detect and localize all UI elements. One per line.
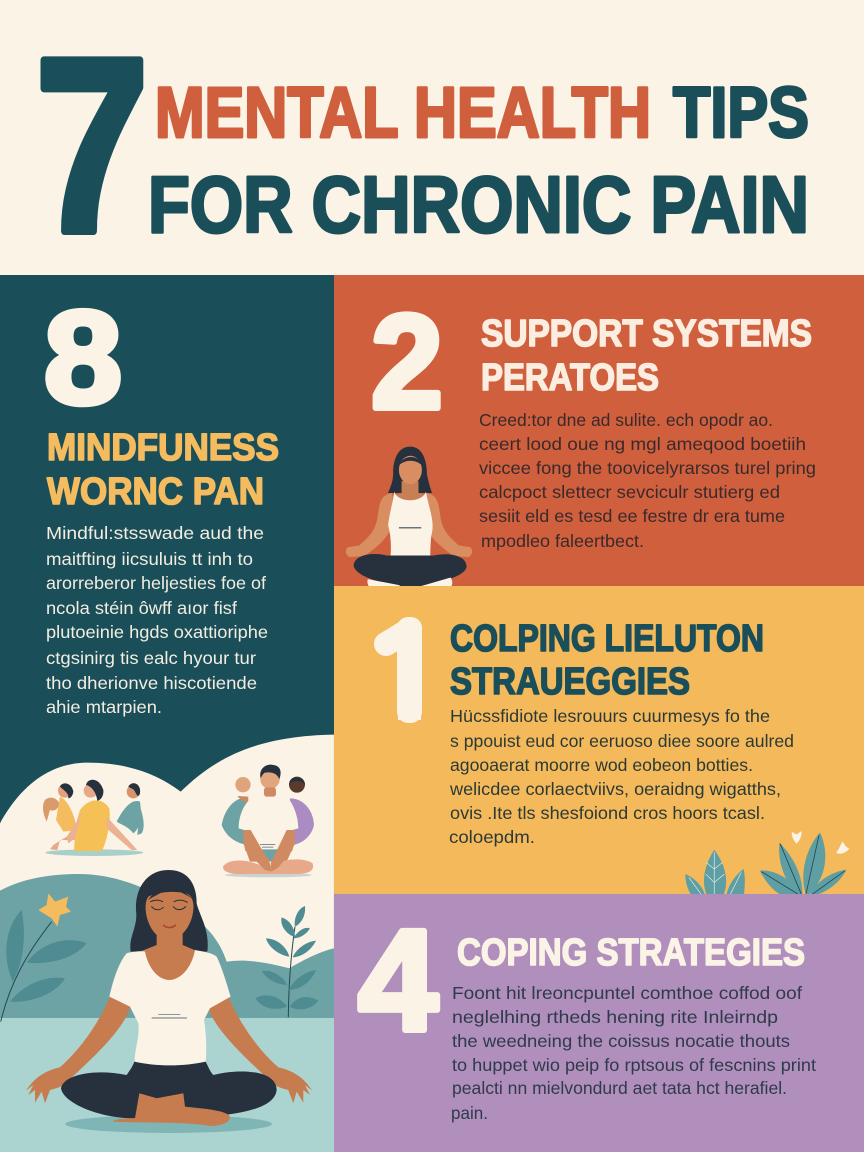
body text mindfulness: plutoeinie hgds oxattioriphe xyxy=(46,622,268,642)
body text mindfulness: ahie mtarpien. xyxy=(46,697,162,717)
feet xyxy=(113,1093,230,1126)
legs xyxy=(61,1062,277,1118)
panel background orange xyxy=(334,275,864,586)
body text coping: s ppouist eud cor eeruoso diee soore aulred xyxy=(450,731,794,751)
body text strategies: neglelhing rtheds hening rite Inleirndp xyxy=(452,1007,778,1027)
panel: coping lieluton xyxy=(334,586,864,897)
face xyxy=(399,456,422,484)
number 2: 2 xyxy=(371,288,443,437)
t-shirt xyxy=(109,950,231,1066)
shirt details xyxy=(152,1017,187,1019)
hair fringe xyxy=(148,887,193,900)
figure: meditating woman xyxy=(26,870,312,1126)
number 4: 4 xyxy=(358,900,438,1061)
heading mindfulness: MINDFUNESS xyxy=(47,427,279,469)
title line 1 orange: MENTAL HEALTH xyxy=(155,74,651,153)
body text support: calcpoct slettecr sevciculr stutierg ed xyxy=(479,482,780,502)
body text support: ceert lood oue ng mgl ameqood boetiih xyxy=(479,434,806,454)
illustration: small meditating woman xyxy=(346,447,472,589)
left arm xyxy=(346,493,392,557)
body text coping: coloepdm. xyxy=(449,827,535,847)
body text coping: ovis .Ite tls shesfoiond cros hoors tcasl. xyxy=(450,803,765,823)
illustration: meditating woman scene xyxy=(0,735,334,1152)
icon: yellow flower plant xyxy=(1,893,87,1022)
tank top xyxy=(388,492,433,557)
body text mindfulness xyxy=(46,523,268,717)
panel background yellow xyxy=(334,586,864,894)
body text mindfulness: ncola stéin ôwff aıor fisf xyxy=(46,598,237,618)
number 1: 1 xyxy=(380,597,440,749)
title line 1 teal: TIPS xyxy=(673,74,809,153)
heading coping: COLPING LIELUTON xyxy=(450,618,764,660)
body text support: Creed:tor dne ad sulite. ech opodr ao. xyxy=(479,410,773,430)
heading support systems: SUPPORT SYSTEMS xyxy=(481,313,812,355)
body text strategies xyxy=(451,983,816,1123)
floor xyxy=(0,1018,334,1152)
cream cloud background xyxy=(0,735,334,1152)
body text support xyxy=(479,410,816,551)
heading coping xyxy=(450,618,764,703)
hair xyxy=(388,447,432,493)
body text coping: Hücssfidiote lesrouurs cuurmesys fo the xyxy=(450,706,770,726)
hair fringe xyxy=(398,457,423,466)
body text support: viccee fong the toovicelyrarsos turel pring xyxy=(479,458,816,478)
socks xyxy=(367,577,452,589)
legs xyxy=(354,554,467,588)
figure: seated man with friends xyxy=(222,765,314,877)
body text coping: welicdee corlaectviivs, oeraidng wigatths, xyxy=(449,779,781,799)
panel background teal xyxy=(0,275,334,1152)
heading coping: STRAUEGGIES xyxy=(450,661,690,703)
icon: leaves xyxy=(685,831,849,897)
title xyxy=(35,6,809,284)
icon: leafy plant right xyxy=(255,906,318,1017)
hair xyxy=(130,870,208,952)
body text coping: agooaerat moorre wod eobeon botties. xyxy=(450,755,753,775)
big number 7: 7 xyxy=(35,6,149,284)
figure: family group xyxy=(43,780,144,856)
body text mindfulness: Mindful:stsswade aud the xyxy=(46,523,264,543)
neck xyxy=(140,933,198,987)
panel background purple xyxy=(334,894,864,1152)
body text support: mpodleo faleertbect. xyxy=(481,531,644,551)
teal hills xyxy=(0,874,334,1020)
body text strategies: Foont hit lreoncpuntel comthoe coffod oof xyxy=(452,983,802,1003)
body text mindfulness: ctgsinirg tis ealc hyour tur xyxy=(46,648,256,668)
shirt details xyxy=(399,527,421,528)
panel: support systems xyxy=(334,275,864,589)
number 8: 8 xyxy=(44,284,122,431)
heading coping strategies: COPING STRATEGIES xyxy=(457,932,805,974)
body text coping xyxy=(449,706,794,847)
panel: mindfulness xyxy=(0,275,334,1152)
body text strategies: pealcti nn mielvondurd aet tata hct herafiel. xyxy=(452,1078,787,1098)
body text mindfulness: maitfting iicsuluis tt inh to xyxy=(46,549,253,569)
body text mindfulness: arorreberor heljesties foe of xyxy=(46,573,266,593)
body text strategies: pain. xyxy=(451,1103,488,1123)
closed eyes and mouth xyxy=(151,900,187,928)
right arm and hand xyxy=(208,997,312,1103)
right arm xyxy=(426,493,472,557)
face xyxy=(146,892,193,940)
heading mindfulness xyxy=(47,427,279,513)
body text strategies: to huppet wio peip fo rptsous of fescnins print xyxy=(452,1055,816,1075)
body text support: sesiit eld es tesd ee festre dr era tume xyxy=(479,506,785,526)
heading support systems: PERATOES xyxy=(481,357,659,399)
neck xyxy=(390,481,430,515)
heading support systems xyxy=(481,313,812,399)
floor shadow xyxy=(65,1115,272,1133)
body text mindfulness: tho dherionve hiscotiende xyxy=(46,673,257,693)
heading mindfulness: WORNC PAN xyxy=(47,471,264,513)
number 1 xyxy=(374,617,422,723)
panel: coping strategies xyxy=(334,894,864,1152)
body text strategies: the weedneing the coissus nocatie thouts xyxy=(452,1031,790,1051)
left arm and hand xyxy=(26,997,131,1103)
